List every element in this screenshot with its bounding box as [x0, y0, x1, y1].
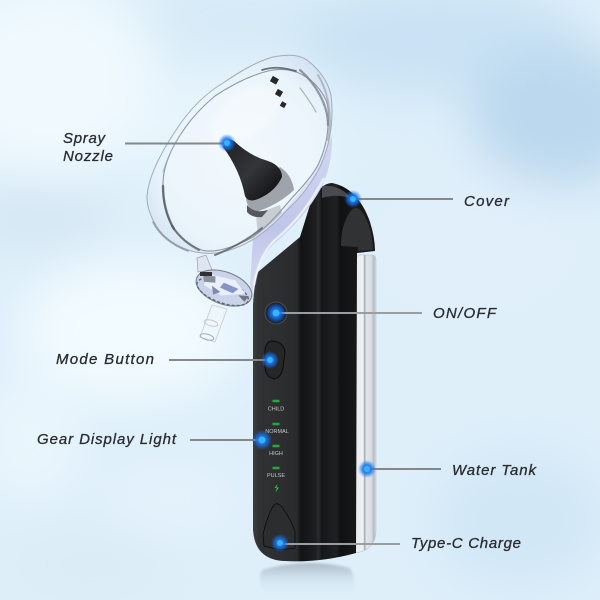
nozzle collar — [246, 167, 294, 212]
base stem — [197, 255, 212, 272]
cover shine — [322, 186, 352, 199]
tube end rings — [200, 318, 218, 342]
callout: Spray Nozzle — [63, 130, 236, 165]
device — [253, 183, 376, 561]
callout: Water Tank — [358, 460, 538, 479]
callout: ON/OFF: ON/OFF — [433, 305, 497, 322]
neck highlight — [254, 178, 324, 285]
floor reflection of the device — [260, 563, 354, 598]
gear display lights: PULSE — [267, 473, 285, 479]
callout: Cover: Cover — [464, 193, 510, 210]
gear display lights: HIGH — [269, 451, 283, 457]
gear display lights — [265, 400, 289, 492]
main body and cover — [253, 183, 375, 561]
droplet holes — [270, 76, 287, 108]
callout: Mode Button: Mode Button — [56, 351, 154, 368]
water tank — [354, 255, 376, 553]
base crystal — [191, 263, 257, 313]
callout: Mode Button — [56, 351, 279, 369]
bowl rim outer edge — [147, 55, 332, 253]
bowl inner edge — [163, 69, 328, 251]
transparent spray bowl — [147, 55, 332, 342]
cover panel — [341, 208, 373, 251]
callout: Spray Nozzle: Spray — [63, 130, 106, 147]
ON/OFF button — [265, 302, 287, 324]
callout: Gear Display Light — [37, 430, 272, 450]
body seen through the glass — [256, 205, 284, 238]
collar highlight — [247, 205, 268, 217]
callout: Spray Nozzle: Nozzle — [63, 148, 113, 165]
gear display lights: CHILD — [268, 406, 284, 412]
callout: Gear Display Light: Gear Display Light — [37, 431, 177, 448]
callout: ON/OFF — [266, 303, 497, 323]
callout: Type-C Charge — [271, 534, 521, 552]
Type-C charge port cover — [263, 504, 295, 550]
mode button — [265, 341, 285, 379]
inner sheen — [200, 74, 290, 156]
gear display lights: NORMAL — [265, 429, 289, 435]
callout: Type-C Charge: Type-C Charge — [411, 535, 521, 552]
callout: Water Tank: Water Tank — [452, 462, 538, 479]
suction tube — [200, 305, 227, 342]
callout: Cover — [344, 190, 510, 210]
dark glass reflections — [153, 68, 330, 255]
bowl neck and outer surface — [250, 135, 332, 292]
black spray nozzle — [223, 139, 282, 200]
bowl interior — [147, 55, 332, 253]
